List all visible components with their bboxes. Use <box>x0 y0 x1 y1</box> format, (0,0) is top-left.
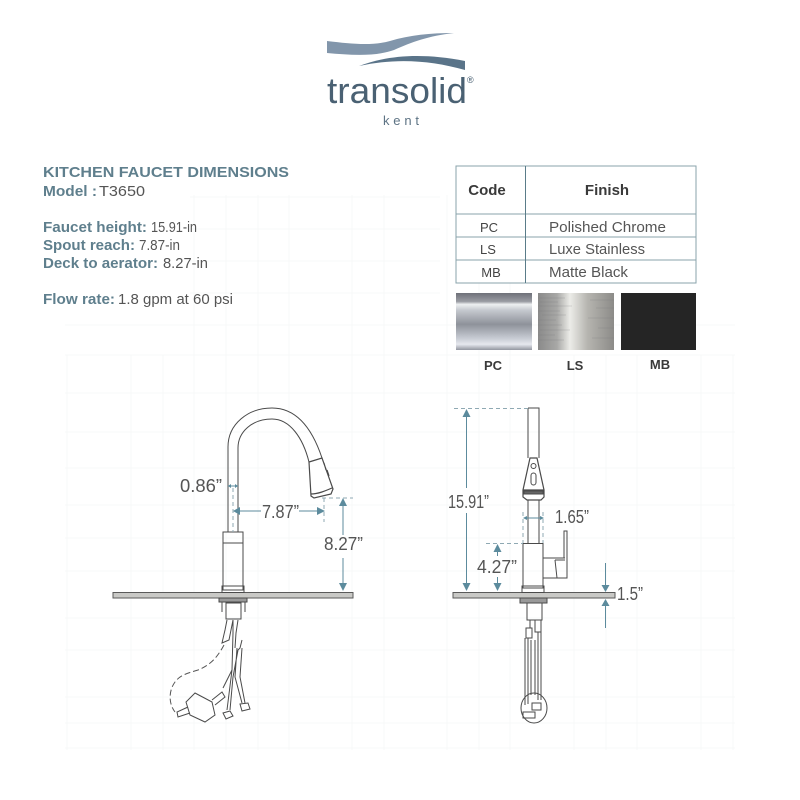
swatch: luxe stainless <box>538 293 614 373</box>
logo <box>327 33 474 128</box>
control box and cables <box>177 692 250 722</box>
dimension: 1.65 inch <box>523 507 589 543</box>
mounting hardware <box>520 598 547 705</box>
dimension: 4.27 inch <box>477 544 523 591</box>
dimension: 7.87 inch: 7.87” <box>262 502 299 522</box>
countertop <box>453 592 615 598</box>
dimension: 1.65 inch: 1.65” <box>555 507 589 527</box>
mounting hardware <box>219 598 247 710</box>
row: matte black: Matte Black <box>549 264 628 281</box>
swatch: matte black: MB <box>650 357 670 372</box>
dashed cable <box>170 645 224 712</box>
swatch: polished chrome <box>456 293 532 373</box>
row: luxe stainless <box>480 241 645 258</box>
diagram: faucet side view <box>113 408 363 722</box>
spout reach <box>43 237 180 254</box>
model: T3650 <box>99 183 145 200</box>
swatch: luxe stainless: LS <box>567 358 584 373</box>
heading: KITCHEN FAUCET DIMENSIONS <box>43 164 289 181</box>
logo wordmark: transolid <box>327 70 467 111</box>
row: matte black <box>481 264 628 281</box>
deck to aerator: 8.27-in <box>163 255 208 272</box>
row: luxe stainless: Luxe Stainless <box>549 241 645 258</box>
row: polished chrome <box>480 219 666 236</box>
spray head <box>523 458 544 500</box>
flow rate: 1.8 gpm at 60 psi <box>118 291 233 308</box>
faucet base <box>222 532 244 592</box>
faucet height: 15.91-in <box>151 219 197 236</box>
model: Model : <box>43 183 97 200</box>
dimension: 7.87 inch <box>233 498 325 522</box>
handle <box>543 531 567 578</box>
faucet spout <box>228 408 322 532</box>
swatch: polished chrome: PC <box>484 358 503 373</box>
row: matte black: MB <box>481 265 501 280</box>
spray head <box>309 458 333 498</box>
background grid <box>65 195 735 750</box>
icon: logo waves <box>327 33 465 70</box>
row: polished chrome: Polished Chrome <box>549 219 666 236</box>
spout reach: 7.87-in <box>139 237 180 254</box>
deck to aerator <box>43 255 208 272</box>
dimension: 1.5 inch: 1.5” <box>617 584 643 604</box>
row: polished chrome: PC <box>480 220 498 235</box>
spout reach: Spout reach: <box>43 237 135 254</box>
dimension: 8.27 inch: 8.27” <box>324 534 363 554</box>
model <box>43 183 145 200</box>
flow rate: Flow rate: <box>43 291 115 308</box>
dimension: 1.5 inch <box>602 563 643 628</box>
logo sub-brand: kent <box>383 113 419 128</box>
deck to aerator: Deck to aerator: <box>43 255 158 272</box>
dimension: 15.91 inch: 15.91” <box>448 492 489 512</box>
table header: code: Code <box>468 182 506 199</box>
table: finish codes <box>456 166 696 283</box>
dimension: 4.27 inch: 4.27” <box>477 557 517 577</box>
countertop <box>113 592 353 598</box>
row: luxe stainless: LS <box>480 242 496 257</box>
faucet height: Faucet height: <box>43 219 147 236</box>
faucet height <box>43 219 197 236</box>
diagram: faucet front view <box>448 408 643 723</box>
flow rate <box>43 291 233 308</box>
dimension: 0.86 inch: 0.86” <box>180 476 222 496</box>
table header: finish: Finish <box>585 182 629 199</box>
hose loop <box>521 693 547 723</box>
dimension: 0.86 inch <box>180 476 238 532</box>
faucet body <box>522 544 544 592</box>
dimension: 15.91 inch <box>448 408 528 591</box>
logo registered mark: ® <box>467 75 474 85</box>
faucet neck <box>528 408 539 543</box>
text block: specifications <box>43 164 289 308</box>
dimension: 8.27 inch <box>322 498 363 591</box>
swatch: matte black <box>621 293 696 372</box>
